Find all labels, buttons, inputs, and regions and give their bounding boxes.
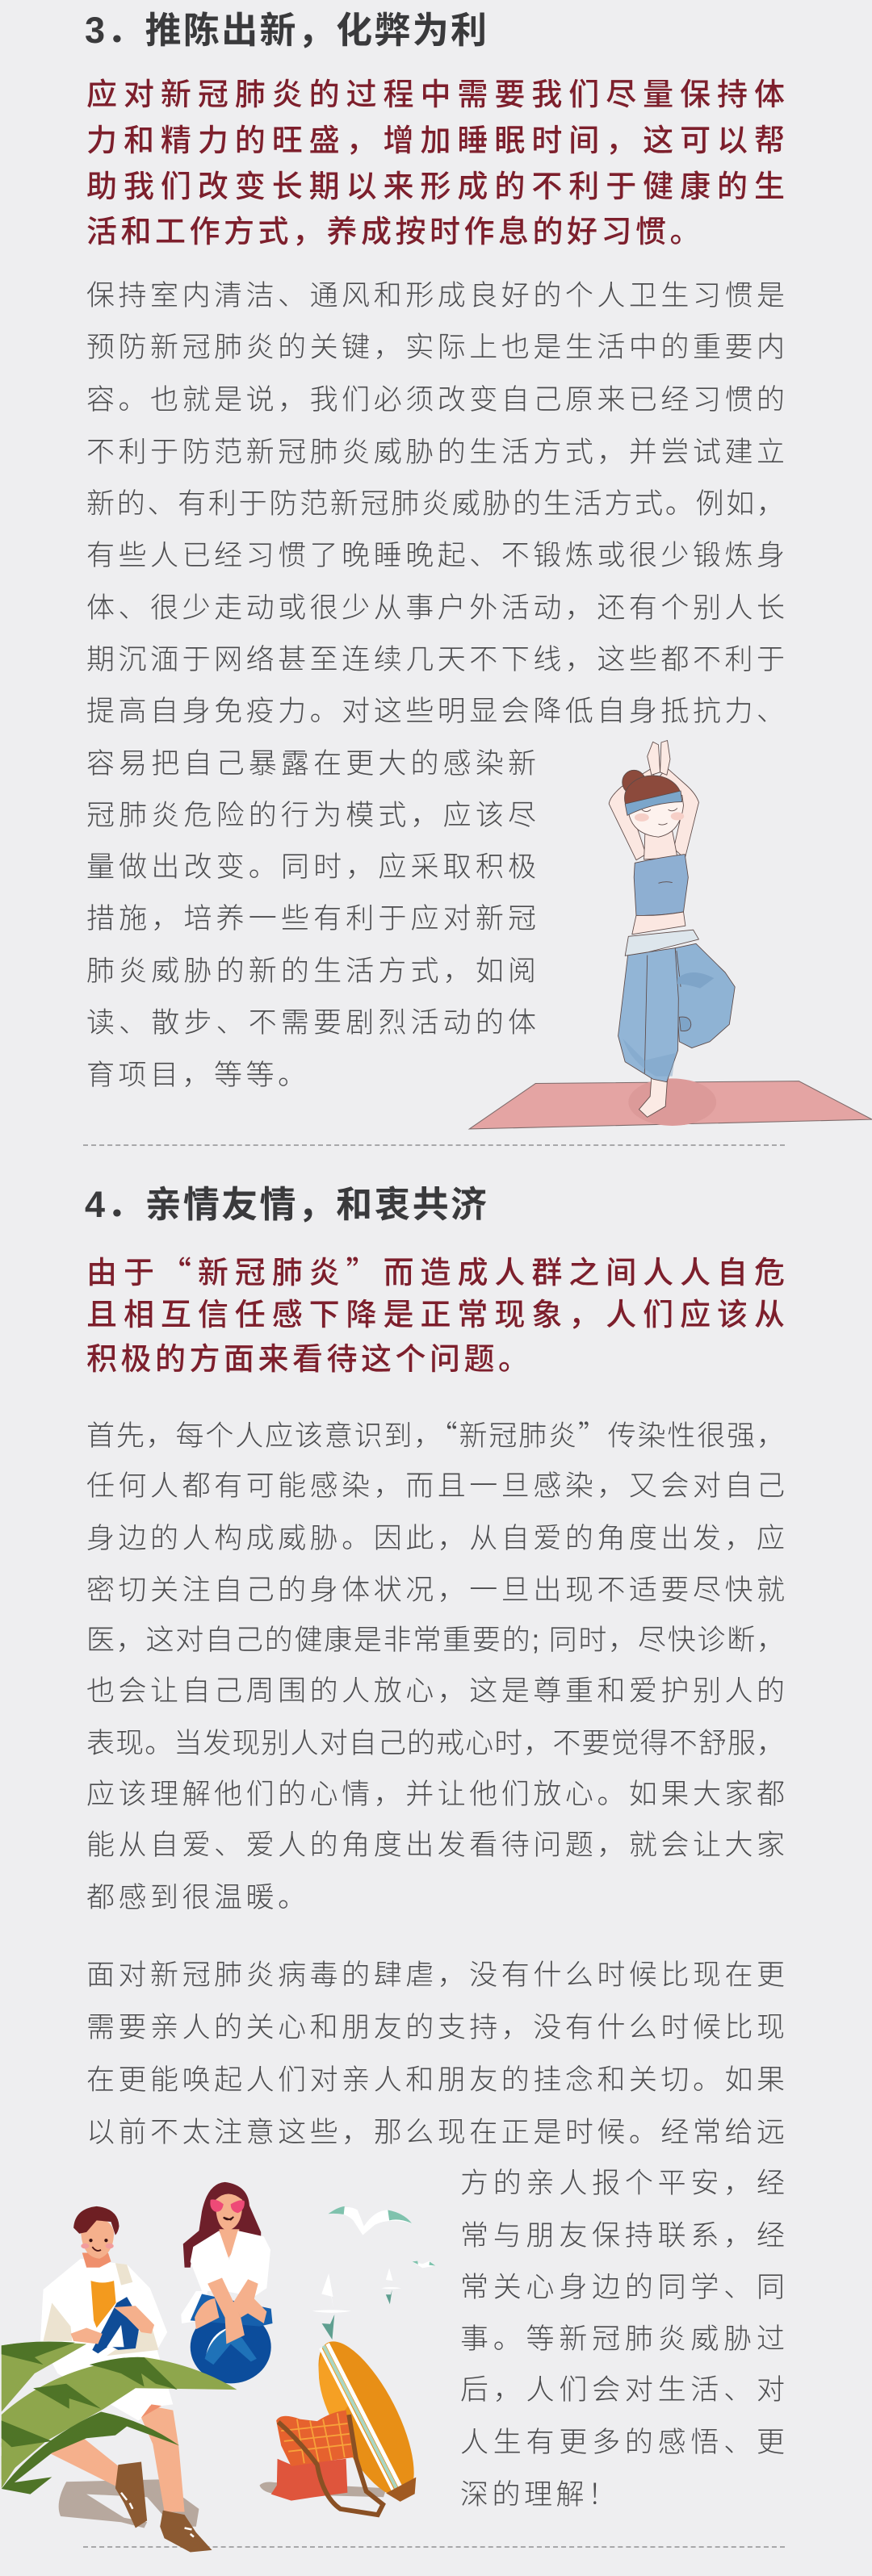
text block: section 4 second paragraph: 面对新冠肺炎病毒的肆虐，没有什么时候比现在更	[86, 1959, 785, 1991]
text block: section 3 body: 措施，培养一些有利于应对新冠	[86, 903, 536, 935]
text block: section 4 first paragraph: 表现。当发现别人对自己的戒心时，不要觉得不舒服，	[86, 1728, 785, 1759]
text block: section 3 body: 期沉湎于网络甚至连续几天不下线，这些都不利于	[86, 644, 785, 675]
text block: section 4 second paragraph: 常关心身边的同学、同	[460, 2272, 785, 2303]
text block: section 4 first paragraph: 密切关注自己的身体状况，一旦出现不适要尽快就	[86, 1574, 785, 1606]
woman	[181, 2182, 273, 2383]
text block: section 4 first paragraph: 医，这对自己的健康是非常重要的; 同时，尽快诊断，	[86, 1625, 785, 1656]
text block: section 4 first paragraph: 都感到很温暖。	[86, 1882, 310, 1913]
illustration: woman doing yoga on a mat	[468, 740, 872, 1130]
text block: section 3 body: 读、散步、不需要剧烈活动的体	[86, 1007, 536, 1039]
heading: section 4: 4．亲情友情，和衷共济	[85, 1184, 488, 1225]
surfboard	[300, 2328, 434, 2513]
yoga figure details	[623, 808, 714, 1077]
text block: section 4 second paragraph: 需要亲人的关心和朋友的支持，没有什么时候比现	[86, 2012, 785, 2043]
heading: section 3: 3．推陈出新，化弊为利	[85, 10, 488, 51]
callout: section 3 red summary: 应对新冠肺炎的过程中需要我们尽量保持体	[86, 78, 785, 112]
text block: section 3 body: 肺炎威胁的新的生活方式，如阅	[86, 956, 536, 987]
callout: section 4 red summary: 由于“新冠肺炎”而造成人群之间人人自危	[86, 1248, 785, 1292]
text block: section 4 second paragraph: 以前不太注意这些，那么现在正是时候。经常给远	[86, 2117, 785, 2148]
seagulls	[312, 2206, 435, 2340]
text block: section 3 body: 保持室内清洁、通风和形成良好的个人卫生习惯是	[86, 280, 785, 312]
ground shadows	[59, 2479, 387, 2528]
text block: section 3 body: 量做出改变。同时，应采取积极	[86, 851, 536, 883]
divider at page bottom	[83, 2546, 785, 2548]
callout: section 3 red summary: 助我们改变长期以来形成的不利于健康的生	[86, 170, 785, 204]
illustration: two friends on the beach with surfboard and bag	[2, 2182, 436, 2552]
text block: section 4 first paragraph: 任何人都有可能感染，而且一旦感染，又会对自己	[86, 1470, 785, 1502]
yoga figure	[609, 741, 735, 1117]
man	[40, 2206, 212, 2552]
text block: section 3 body: 新的、有利于防范新冠肺炎威胁的生活方式。例如，	[86, 488, 785, 520]
text block: section 3 body: 体、很少走动或很少从事户外活动，还有个别人长	[86, 592, 785, 624]
text block: section 4 first paragraph	[86, 1413, 785, 1913]
text block: section 3 body: 育项目，等等。	[86, 1060, 310, 1091]
text block: section 4 second paragraph: 深的理解！	[460, 2479, 620, 2511]
shoulder bag	[271, 2411, 383, 2515]
text block: section 3 body: 提高自身免疫力。对这些明显会降低自身抵抗力、	[86, 696, 785, 727]
text block: section 3 body: 容。也就是说，我们必须改变自己原来已经习惯的	[86, 384, 785, 416]
callout: section 3 red summary: 力和精力的旺盛，增加睡眠时间，这可以帮	[86, 124, 785, 158]
text block: section 4 second paragraph: 后，人们会对生活、对	[460, 2374, 785, 2406]
text block: section 4 second paragraph: 事。等新冠肺炎威胁过	[460, 2323, 785, 2355]
callout: section 4 red summary: 积极的方面来看待这个问题。	[86, 1343, 533, 1377]
divider between sections	[83, 1144, 785, 1146]
text block: section 3 body	[86, 280, 785, 1091]
text block: section 3 body: 有些人已经习惯了晚睡晚起、不锻炼或很少锻炼身	[86, 540, 785, 571]
text block: section 3 body: 不利于防范新冠肺炎威胁的生活方式，并尝试建立	[86, 437, 785, 468]
text block: section 4 first paragraph: 也会让自己周围的人放心，这是尊重和爱护别人的	[86, 1675, 785, 1707]
text block: section 3 body: 预防新冠肺炎的关键，实际上也是生活中的重要内	[86, 332, 785, 363]
text block: section 4 first paragraph: 身边的人构成威胁。因此，从自爱的角度出发，应	[86, 1523, 785, 1554]
text block: section 4 first paragraph: 能从自爱、爱人的角度出发看待问题，就会让大家	[86, 1830, 785, 1861]
palm leaves	[2, 2342, 237, 2494]
yoga mat	[469, 1078, 872, 1129]
text block: section 4 second paragraph	[86, 1959, 785, 2511]
callout: section 4 red summary	[86, 1248, 785, 1377]
text block: section 4 second paragraph: 在更能唤起人们对亲人和朋友的挂念和关切。如果	[86, 2064, 785, 2096]
text block: section 3 body: 冠肺炎危险的行为模式，应该尽	[86, 800, 536, 831]
text block: section 4 second paragraph: 人生有更多的感悟、更	[460, 2427, 785, 2458]
text block: section 4 second paragraph: 方的亲人报个平安，经	[460, 2168, 785, 2199]
callout: section 4 red summary: 且相互信任感下降是正常现象，人们应该从	[86, 1298, 785, 1332]
text block: section 4 first paragraph: 首先，每个人应该意识到，“新冠肺炎”传染性很强，	[86, 1413, 785, 1454]
callout: section 3 red summary: 活和工作方式，养成按时作息的好习惯。	[86, 215, 704, 249]
text block: section 4 first paragraph: 应该理解他们的心情，并让他们放心。如果大家都	[86, 1779, 785, 1810]
text block: section 4 second paragraph: 常与朋友保持联系，经	[460, 2220, 785, 2252]
callout: section 3 red summary	[86, 78, 785, 249]
text block: section 3 body: 容易把自己暴露在更大的感染新	[86, 748, 536, 780]
